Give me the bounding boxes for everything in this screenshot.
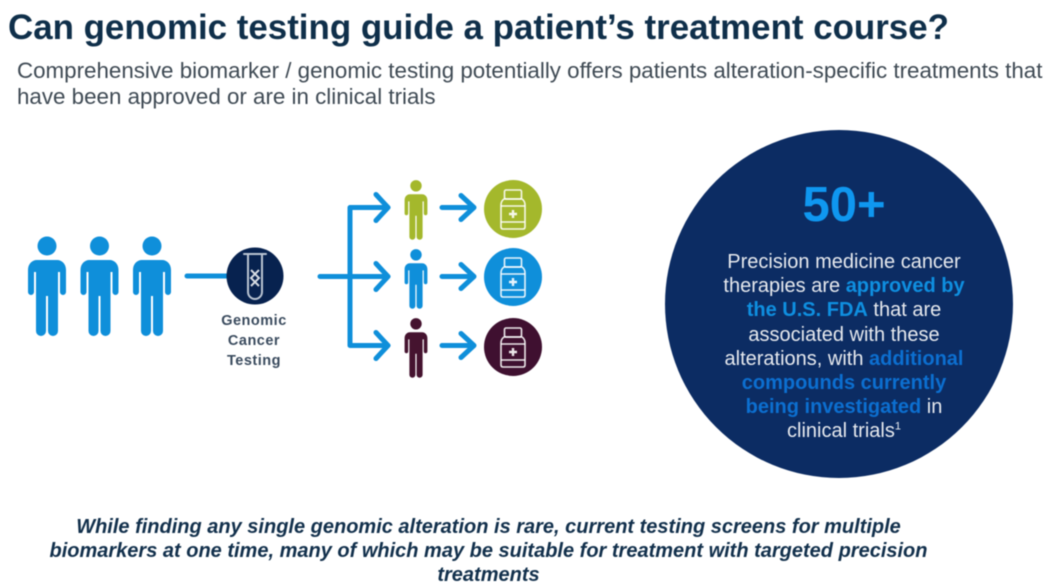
label: genomic cancer testing [221,313,287,369]
arrows to treatments [442,196,474,358]
stat: 50+: 50+ [802,178,886,232]
icon: blue medicine bottle [484,248,542,306]
subtitle: Comprehensive biomarker / genomic testing potentially offers patients alteration-specific treatments that [17,58,1042,83]
takeaway note: While finding any single genomic alteration is rare, current testing screens for multiple [76,516,901,538]
title: Can genomic testing guide a patient’s treatment course? [8,8,949,47]
stat description: associated with these [748,324,940,346]
stat description: therapies are approved by [723,275,965,297]
takeaway note: treatments [437,564,540,586]
icon: green patient [405,180,427,240]
stat description: the U.S. FDA that are [747,299,941,321]
icon: genomic test tube [226,248,284,304]
stat circle background [665,130,1013,478]
stat description: alterations, with additional [725,348,963,370]
icons: three patients [28,236,171,336]
label: genomic cancer testing: Cancer [228,333,280,349]
stat description: being investigated in [746,396,942,418]
stat description: clinical trials1 [787,420,901,442]
stat description [722,251,965,442]
icon: blue patient [405,249,427,309]
subtitle [17,58,1043,110]
stat description: Precision medicine cancer [727,251,961,273]
subtitle: have been approved or are in clinical trials [17,84,436,109]
takeaway note [49,516,928,586]
branching arrows [320,194,388,358]
connector line to testing [187,274,232,278]
icon: dark medicine bottle [484,318,542,376]
label: genomic cancer testing: Testing [227,353,281,369]
label: genomic cancer testing: Genomic [221,313,287,329]
stat description: compounds currently [742,372,946,394]
icon: green medicine bottle [484,180,542,238]
icon: dark patient [405,318,427,378]
takeaway note: biomarkers at one time, many of which may be suitable for treatment with targeted precision [50,540,928,562]
